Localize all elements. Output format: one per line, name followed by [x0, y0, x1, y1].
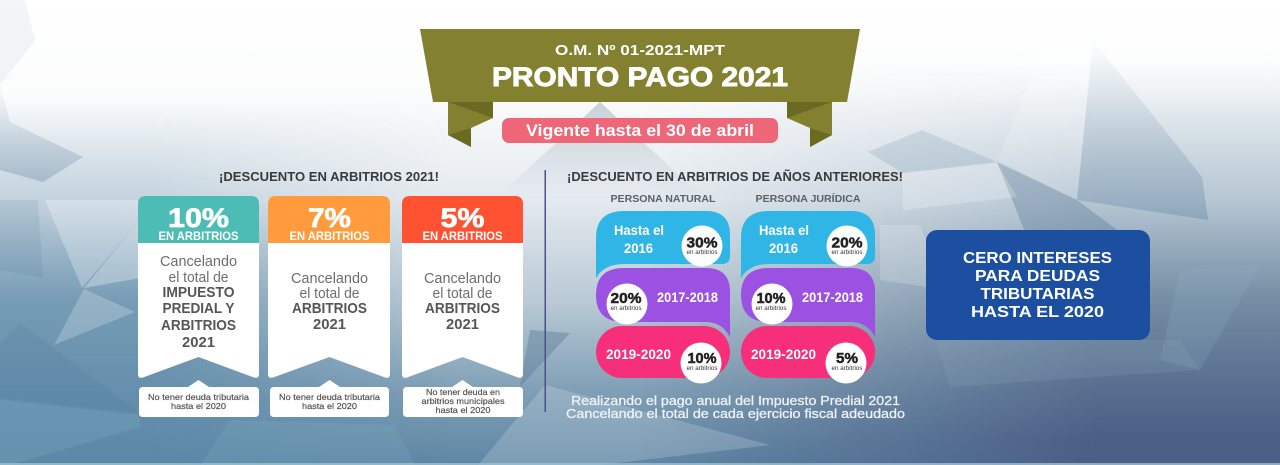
callout: zero interest: [926, 230, 1150, 340]
tier: 2019-2020: [596, 326, 730, 384]
card: 7%: EN ARBITRIOS: [290, 231, 370, 243]
card: 5%: Cancelando: [424, 270, 501, 287]
card: 7%: Cancelando: [291, 270, 368, 287]
banner tail: left: [448, 102, 493, 147]
note: card 5% condition: hasta el 2020: [436, 405, 491, 415]
tier: hasta 2016: 30%: [686, 234, 718, 252]
card: 7%: ARBITRIOS: [292, 300, 367, 317]
tier: 2019-2020: 2019-2020: [751, 346, 816, 362]
callout: zero interest: HASTA EL 2020: [971, 304, 1104, 321]
validity pill: Vigente hasta el 30 de abril: [526, 122, 754, 140]
tier: hasta 2016: Hasta el: [614, 222, 664, 238]
note: card 7% condition: [270, 380, 389, 417]
card: 7%: el total de: [300, 285, 360, 302]
card: 7%: [268, 196, 390, 378]
tier: 2017-2018: [741, 268, 875, 337]
footnote: conditions: Cancelando el total de cada ejercicio fiscal adeudado: [566, 406, 905, 421]
tier: 2019-2020: 10%: [688, 350, 716, 367]
note: card 10% condition: hasta el 2020: [171, 401, 226, 411]
note: card 5% condition: No tener deuda en: [426, 387, 500, 397]
tier: 2017-2018: en arbitrios: [756, 305, 787, 312]
title banner: [420, 29, 860, 147]
card: 7%: 7%: [308, 203, 351, 233]
card: 10%: IMPUESTO: [162, 284, 235, 301]
tier: 2019-2020: en arbitrios: [832, 365, 863, 372]
card: 5%: 5%: [440, 203, 484, 233]
tier: 2019-2020: [741, 326, 875, 384]
tier: hasta 2016: Hasta el: [759, 222, 809, 238]
note: card 7% condition: hasta el 2020: [302, 401, 357, 411]
note: card 5% condition: [403, 380, 523, 417]
heading: previous years discount: ¡DESCUENTO EN ARBITRIOS DE AÑOS ANTERIORES!: [567, 169, 903, 184]
tier: hasta 2016: en arbitrios: [832, 249, 863, 256]
card: 7%: 2021: [313, 316, 346, 333]
tier: 2017-2018: 10%: [756, 290, 786, 307]
tier: 2017-2018: 20%: [610, 290, 642, 307]
banner heading: PRONTO PAGO 2021: [492, 62, 788, 92]
column: persona juridica tiers: [741, 211, 875, 384]
banner ordinance number: O.M. Nº 01-2021-MPT: [555, 43, 725, 59]
column label: persona juridica: PERSONA JURÍDICA: [756, 192, 861, 205]
tier: hasta 2016: en arbitrios: [686, 249, 718, 256]
card: 10%: el total de: [168, 269, 228, 286]
note: card 7% condition: No tener deuda tributaria: [279, 392, 380, 402]
banner tail: right: [787, 102, 832, 147]
card: 5%: EN ARBITRIOS: [422, 231, 503, 243]
card: 10%: PREDIAL Y: [162, 300, 234, 317]
tier: hasta 2016: [596, 211, 730, 278]
card: 5%: 2021: [446, 316, 479, 333]
tier: 2019-2020: 2019-2020: [606, 346, 671, 362]
tier: 2017-2018: en arbitrios: [610, 305, 642, 312]
note: card 10% condition: No tener deuda tributaria: [148, 392, 249, 402]
card: 10%: Cancelando: [160, 253, 237, 270]
validity pill: [502, 118, 778, 143]
tier: hasta 2016: 20%: [832, 234, 862, 252]
column label: persona natural: PERSONA NATURAL: [610, 193, 716, 205]
tier: 2017-2018: [596, 268, 730, 337]
card: 5%: [402, 196, 523, 378]
column: persona natural tiers: [596, 211, 730, 384]
footnote: conditions: Realizando el pago anual del Impuesto Predial 2021: [571, 393, 900, 408]
card: 10%: [138, 196, 259, 378]
callout: zero interest: PARA DEUDAS: [975, 268, 1100, 285]
tier: hasta 2016: 2016: [769, 240, 798, 256]
tier: 2017-2018: 2017-2018: [657, 289, 718, 305]
card: 5%: el total de: [432, 285, 492, 302]
card: 10%: ARBITRIOS: [161, 317, 236, 334]
tier: hasta 2016: [741, 211, 875, 278]
card: 10%: 10%: [168, 203, 229, 233]
footnote: conditions: [566, 393, 905, 421]
tier: 2017-2018: 2017-2018: [802, 289, 863, 305]
heading: 2021 discount: ¡DESCUENTO EN ARBITRIOS 2021!: [219, 170, 439, 184]
card: 10%: 2021: [182, 334, 215, 351]
callout: zero interest: CERO INTERESES: [963, 250, 1112, 267]
callout: zero interest: TRIBUTARIAS: [980, 286, 1095, 303]
note: card 10% condition: [139, 380, 259, 417]
banner ribbon: [420, 29, 860, 102]
tier: 2019-2020: en arbitrios: [686, 365, 718, 372]
tier: 2019-2020: 5%: [836, 350, 858, 367]
tier: hasta 2016: 2016: [624, 240, 653, 256]
card: 10%: EN ARBITRIOS: [158, 231, 239, 243]
note: card 5% condition: arbitrios municipales: [422, 396, 504, 406]
card: 5%: ARBITRIOS: [425, 300, 500, 317]
